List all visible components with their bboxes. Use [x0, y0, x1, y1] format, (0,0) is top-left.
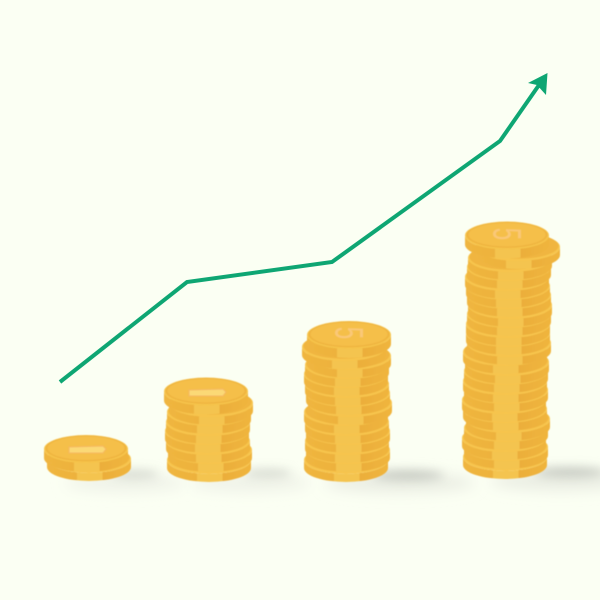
coin stack 3: [302, 321, 392, 482]
ground shadows: [65, 467, 600, 492]
coin stack 2: [164, 378, 253, 482]
coin stack 1: [44, 435, 131, 481]
coin value 5: 5: [327, 327, 371, 339]
coin value 1: 1: [196, 390, 218, 394]
coin value 5: 5: [485, 228, 529, 240]
coin stack 4: [462, 222, 560, 479]
growth arrow: [60, 73, 548, 382]
coin value 1: 1: [76, 448, 98, 452]
